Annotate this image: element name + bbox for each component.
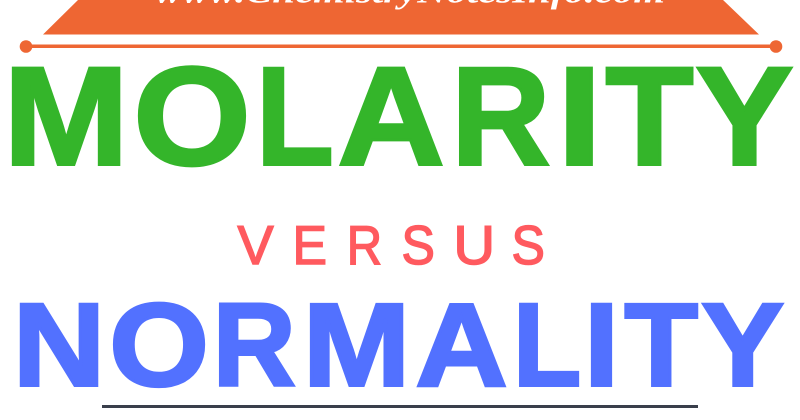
heading: NORMALITY: L — [513, 280, 581, 411]
heading: NORMALITY: R — [213, 279, 296, 411]
subheading: VERSUS: S — [512, 215, 545, 277]
heading: NORMALITY: M — [303, 279, 410, 411]
heading: MOLARITY: M — [3, 37, 129, 194]
heading: NORMALITY: T — [624, 280, 698, 411]
heading: MOLARITY: I — [557, 37, 602, 194]
heading: MOLARITY: T — [606, 38, 693, 195]
heading: NORMALITY — [13, 279, 784, 411]
heading: NORMALITY: A — [416, 280, 508, 411]
subheading: VERSUS: E — [292, 216, 327, 276]
heading: NORMALITY: Y — [702, 279, 784, 411]
subheading: VERSUS: R — [347, 215, 382, 277]
dark underline — [102, 405, 698, 408]
subheading: VERSUS: S — [402, 215, 435, 277]
subheading: VERSUS: V — [238, 215, 274, 276]
heading: MOLARITY: R — [451, 39, 550, 195]
subheading: VERSUS: U — [453, 214, 495, 276]
orange divider with end dots — [20, 40, 782, 53]
subheading: VERSUS — [238, 214, 545, 277]
heading: NORMALITY: N — [13, 280, 105, 411]
heading: MOLARITY: A — [338, 37, 445, 195]
heading: MOLARITY: O — [133, 38, 251, 194]
heading: NORMALITY: O — [109, 280, 209, 411]
heading: NORMALITY: I — [584, 279, 619, 411]
heading: MOLARITY: L — [256, 39, 334, 195]
banner: orange trapezoid with website address — [43, 0, 759, 34]
heading: MOLARITY — [3, 37, 793, 195]
heading: MOLARITY: Y — [696, 38, 793, 195]
